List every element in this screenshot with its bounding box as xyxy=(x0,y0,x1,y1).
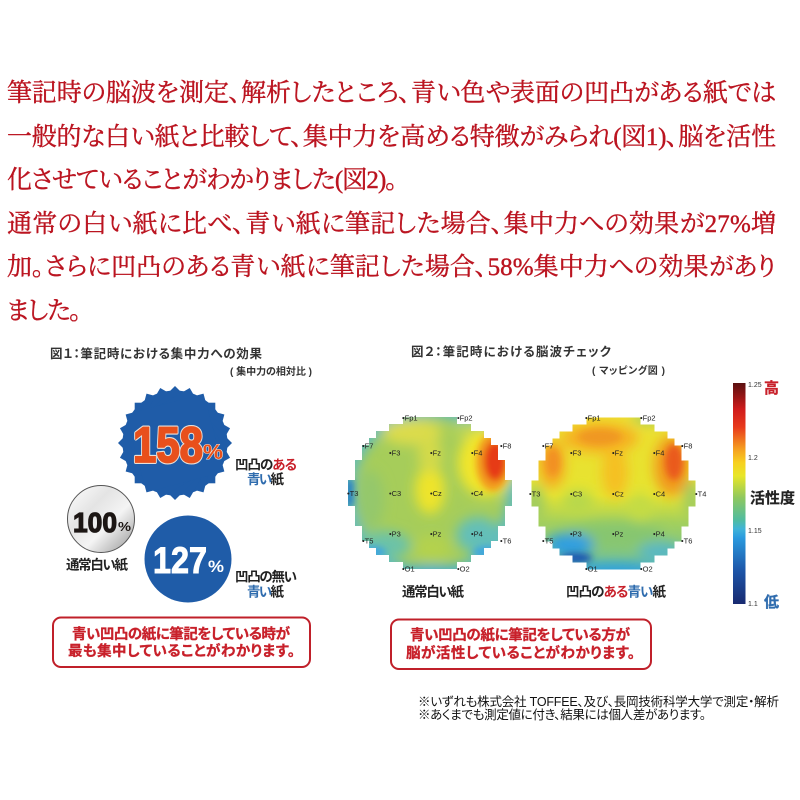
badge 127%: % xyxy=(208,557,224,576)
electrode labels: right map: •Fz xyxy=(612,448,623,458)
electrode labels: left map: •Cz xyxy=(430,489,442,498)
label: normal white paper map: 通常白い紙 xyxy=(402,584,464,600)
electrode labels: right map xyxy=(529,414,706,574)
electrode labels: right map: •F4 xyxy=(653,448,664,458)
figure 2 subtitle: ( マッピング図 ) xyxy=(592,364,665,377)
electrode labels: right map: •Fp1 xyxy=(585,414,601,422)
figure 1 subtitle: ( 集中力の相対比 ) xyxy=(230,365,312,378)
panel: figure 2 EEG mapping xyxy=(340,344,795,669)
callout: figure 2 conclusion: 脳が活性していることがわかります。 xyxy=(406,644,635,662)
heading text: 一般的な白い紙と比較して、集中力を高める特徴がみられ(図1)、脳を活性 xyxy=(7,123,776,151)
color scale legend: 1.25 xyxy=(748,382,762,389)
electrode labels: left map: •C4 xyxy=(471,489,483,498)
label: textured blue paper map: 凹凸のある青い紙 xyxy=(566,584,666,600)
figure 1 title: 図１：筆記時における集中力への効果 xyxy=(50,346,262,361)
callout: figure 1 conclusion: 最も集中していることがわかります。 xyxy=(68,642,295,660)
electrode labels: right map: •Pz xyxy=(612,530,624,538)
footnotes: ※いずれも株式会社 TOFFEE、及び、長岡技術科学大学で測定・解析 xyxy=(418,694,779,709)
label: untextured blue paper: 凹凸の無い xyxy=(235,568,297,584)
starburst badge 158% xyxy=(118,386,232,500)
color scale legend: 1.1 xyxy=(748,601,758,608)
label: high: 高 xyxy=(764,380,779,397)
figure 2 title: 図２：筆記時における脳波チェック xyxy=(411,344,611,359)
electrode labels: left map xyxy=(347,414,511,574)
label: blue paper 2: 青い紙 xyxy=(247,584,284,600)
electrode labels: right map: •Fp2 xyxy=(640,414,656,422)
heading text: 化させていることがわかりました(図2)。 xyxy=(7,166,398,194)
electrode labels: right map: •P3 xyxy=(570,530,582,538)
electrode labels: right map: •T3 xyxy=(529,490,540,498)
color scale legend: 1.15 xyxy=(748,528,762,535)
electrode labels: left map: •Fp1 xyxy=(402,414,418,422)
color scale legend: 1.2 xyxy=(748,455,758,462)
heading text: 通常の白い紙に比べ、青い紙に筆記した場合、集中力への効果が27%増 xyxy=(7,210,776,238)
callout: figure 2 conclusion xyxy=(391,620,651,669)
electrode labels: right map: •P4 xyxy=(653,530,665,538)
electrode labels: left map: •F4 xyxy=(471,448,482,458)
heading text: 筆記時の脳波を測定、解析したところ、青い色や表面の凹凸がある紙では xyxy=(7,79,776,107)
label: activity level: 活性度 xyxy=(750,489,795,507)
electrode labels: right map: •F3 xyxy=(570,448,581,458)
electrode labels: left map: •O1 xyxy=(402,564,415,574)
electrode labels: right map: •F8 xyxy=(681,442,692,450)
electrode labels: left map: •Fz xyxy=(430,448,441,458)
callout: figure 1 conclusion xyxy=(53,618,310,667)
badge 100% xyxy=(68,486,134,552)
electrode labels: left map: •Fp2 xyxy=(457,414,473,422)
electrode labels: left map: •T5 xyxy=(362,536,373,546)
electrode labels: left map: •T3 xyxy=(347,489,358,498)
electrode labels: right map: •T6 xyxy=(681,536,692,546)
label: low: 低 xyxy=(764,594,779,611)
electrode labels: right map: •F7 xyxy=(542,442,553,450)
heading text xyxy=(7,79,776,325)
electrode labels: right map: •T4 xyxy=(695,490,706,498)
electrode labels: left map: •P3 xyxy=(389,530,401,538)
callout: figure 1 conclusion: 青い凹凸の紙に筆記をしている時が xyxy=(72,625,291,643)
heat map: textured blue paper xyxy=(532,418,696,570)
starburst badge 158%: 158 xyxy=(133,417,203,473)
badge 100%: % xyxy=(118,519,131,534)
heading text: 加。さらに凹凸のある青い紙に筆記した場合、58%集中力への効果があり xyxy=(7,253,776,281)
electrode labels: left map: •Pz xyxy=(430,530,442,538)
electrode labels: right map: •C3 xyxy=(570,490,582,498)
badge 100%: 100 xyxy=(73,507,117,538)
heading text: ました。 xyxy=(7,298,82,325)
heat map: normal white paper xyxy=(348,417,512,569)
label: normal white paper: 通常白い紙 xyxy=(66,556,128,572)
badge 127% xyxy=(144,516,232,602)
callout: figure 2 conclusion: 青い凹凸の紙に筆記をしている方が xyxy=(410,626,631,644)
footnotes: ※あくまでも測定値に付き、結果には個人差があります。 xyxy=(418,707,706,722)
electrode labels: right map: •O2 xyxy=(640,564,653,574)
starburst badge 158%: % xyxy=(203,441,223,464)
label: blue paper: 青い紙 xyxy=(247,471,284,487)
electrode labels: right map: •O1 xyxy=(585,564,598,574)
panel: figure 1 concentration effect xyxy=(50,346,312,667)
electrode labels: left map: •T6 xyxy=(500,536,511,546)
color scale legend xyxy=(733,380,795,611)
electrode labels: left map: •P4 xyxy=(471,530,483,538)
badge 127%: 127 xyxy=(153,540,207,581)
electrode labels: left map: •F3 xyxy=(389,448,400,458)
electrode labels: left map: •F7 xyxy=(362,442,373,450)
electrode labels: left map: •F8 xyxy=(500,442,511,450)
electrode labels: right map: •C4 xyxy=(653,490,665,498)
electrode labels: right map: •Cz xyxy=(612,490,624,498)
electrode labels: right map: •T5 xyxy=(542,536,553,546)
starburst badge 158%: 158 xyxy=(133,417,203,473)
label: textured blue paper: 凹凸のある xyxy=(235,458,297,472)
electrode labels: left map: •O2 xyxy=(457,564,470,574)
electrode labels: left map: •C3 xyxy=(389,489,401,498)
footnotes xyxy=(418,694,779,722)
